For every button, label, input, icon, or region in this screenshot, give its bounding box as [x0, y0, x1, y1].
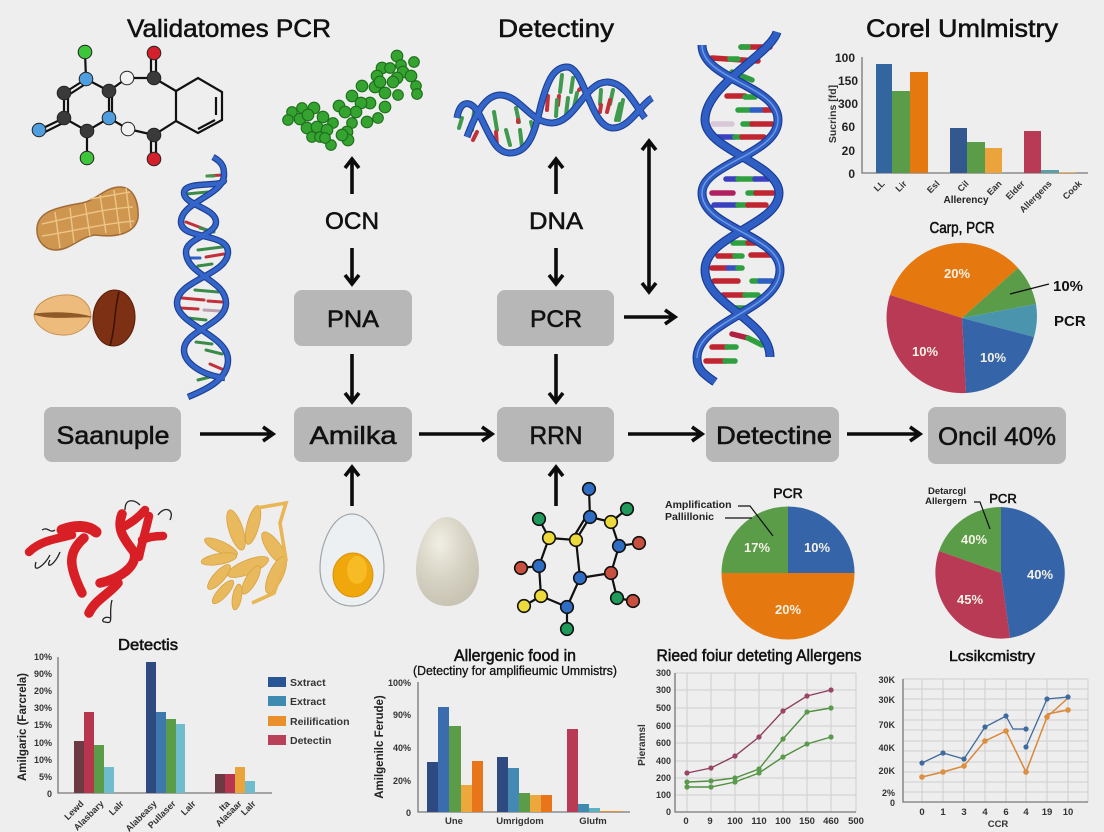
bar chart: Allergenic food: 20%: [393, 776, 411, 786]
line chart: Lcsikcmistry: Lcsikcmistry: [949, 648, 1036, 665]
line chart: Rieed foiur deteting Allergens: 0: [683, 816, 689, 827]
bar chart: Detectis: 15%: [34, 720, 52, 730]
label: DNA: DNA: [529, 208, 583, 235]
icon: green protein blob: [283, 50, 422, 150]
bar chart: top right: [827, 51, 1088, 215]
bar chart: top right: 100: [835, 51, 855, 65]
bar chart: top right: Elder: [1004, 178, 1027, 202]
pie chart: Carp PCR: 20%: [944, 266, 970, 281]
bar chart: Allergenic food: 40%: [393, 743, 411, 753]
bar chart: top right: Ean: [985, 179, 1004, 197]
flow node: PNA: PNA: [327, 306, 379, 333]
arrow: Detectine to Oncil: [847, 427, 920, 441]
flow node: PNA: [294, 290, 412, 346]
pie chart: PCR detected allergen: [925, 486, 1065, 639]
bar chart: Detectis: 10%: [34, 652, 52, 662]
icon: coloured molecule: [515, 483, 645, 635]
flow node: Oncil 40%: [928, 407, 1066, 464]
bar chart: Detectis: 0: [47, 789, 52, 799]
bar chart: top right: LL: [872, 178, 887, 193]
legend: Detectis: [268, 677, 350, 747]
bar chart: Allergenic food: Glufm: [579, 816, 607, 827]
line chart: Lcsikcmistry: 10: [1063, 807, 1073, 818]
pie chart: PCR amplification: 10%: [804, 540, 830, 555]
pie chart: Carp PCR: [887, 220, 1086, 393]
bar chart: top right: Allergens: [1018, 179, 1054, 215]
line chart: Lcsikcmistry: CCR: [988, 819, 1008, 830]
legend: Detectis: Detectin: [290, 735, 331, 747]
bar chart: top right: 300: [838, 97, 858, 111]
line chart: Rieed foiur deteting Allergens: 100: [775, 816, 791, 827]
title: Corel Umlmistry: Corel Umlmistry: [866, 15, 1059, 43]
pie chart: PCR amplification: 17%: [744, 540, 770, 555]
pie chart: Carp PCR: 10%: [1053, 278, 1083, 295]
arrow: RRN to Detectine: [628, 427, 702, 441]
pie chart: PCR amplification: 20%: [775, 602, 801, 617]
bar chart: top right: Esl: [925, 179, 942, 195]
bar chart: top right: Cook: [1061, 178, 1084, 202]
arrow: PNA to Amilka: [345, 354, 359, 402]
line chart: Rieed foiur deteting Allergens: Pieramsl: [637, 724, 648, 766]
icon: DNA helix left: [177, 157, 228, 397]
bar chart: Detectis: Amilgaric (Farcrela): [17, 673, 29, 781]
bar chart: Detectis: 5%: [39, 772, 52, 782]
bar chart: top right: 60: [842, 120, 855, 134]
line chart: Lcsikcmistry: 19: [1042, 807, 1052, 818]
flow node: Detectine: [706, 407, 839, 462]
arrow: double headed vertical: [642, 141, 656, 292]
arrow: DNA to PCR: [549, 248, 563, 284]
pie chart: Carp PCR: 10%: [980, 350, 1006, 365]
line chart: Lcsikcmistry: 0: [890, 798, 895, 808]
line chart: Lcsikcmistry: 1: [940, 807, 946, 818]
icon: wheat grains: [200, 503, 291, 611]
bar chart: top right: Allerency: [943, 195, 989, 206]
icon: red protein ribbon: [29, 501, 171, 623]
bar chart: Detectis: 20%: [34, 686, 52, 696]
line chart: Rieed foiur deteting Allergens: 200: [656, 773, 671, 783]
line chart: Rieed foiur deteting Allergens: 600: [656, 738, 671, 748]
bar chart: Detectis: 10%: [34, 755, 52, 765]
line chart: Rieed foiur deteting Allergens: 150: [799, 816, 815, 827]
line chart: Lcsikcmistry: 40K: [878, 743, 895, 753]
bar chart: Allergenic food: Une: [445, 816, 463, 827]
bar chart: top right: 150: [838, 74, 858, 88]
title: Validatomes PCR: Validatomes PCR: [127, 15, 331, 43]
bar chart: Detectis: 90%: [34, 669, 52, 679]
line chart: Rieed foiur deteting Allergens: 300: [656, 685, 671, 695]
icon: peanut: [37, 187, 138, 250]
line chart: Rieed foiur deteting Allergens: [637, 646, 864, 827]
icon: nut halves: [34, 295, 91, 335]
arrow: molecule to RRN: [549, 467, 563, 506]
pie chart: Carp PCR: PCR: [1054, 313, 1086, 330]
flow node: Oncil 40%: Oncil 40%: [938, 423, 1056, 451]
arrow: OCN to PNA: [345, 248, 359, 284]
title: Detectiny: Detectiny: [498, 15, 615, 43]
bar chart: Detectis: Lalr: [179, 798, 198, 817]
line chart: Lcsikcmistry: 20K: [878, 766, 895, 776]
pie chart: PCR detected allergen: 40%: [1027, 567, 1053, 582]
line chart: Rieed foiur deteting Allergens: 600: [656, 721, 671, 731]
bar chart: Allergenic food: Umrigdom: [496, 816, 544, 827]
bar chart: Detectis: 30%: [34, 703, 52, 713]
icon: cracked egg with yolk: [320, 514, 384, 606]
line chart: Lcsikcmistry: 30K: [878, 675, 895, 685]
arrow: egg to Amilka: [345, 467, 359, 506]
line chart: Lcsikcmistry: 0: [919, 807, 925, 818]
bar chart: Detectis: Alasbary: [72, 799, 106, 832]
flow node: Saanuple: [44, 407, 181, 462]
pie chart: PCR detected allergen: Allergern: [925, 496, 967, 507]
flow node: PCR: [497, 290, 614, 346]
line chart: Rieed foiur deteting Allergens: 0: [666, 807, 671, 817]
line chart: Lcsikcmistry: 30K: [878, 695, 895, 705]
pie chart: PCR amplification: Pallillonic: [665, 511, 714, 523]
bar chart: Detectis: Pullaser: [146, 798, 178, 830]
line chart: Rieed foiur deteting Allergens: 9: [707, 816, 713, 827]
bar chart: Allergenic food: Amilgenilc Ferude): [374, 695, 386, 799]
pie chart: PCR amplification: [665, 485, 854, 640]
flow node: Amilka: [294, 407, 412, 462]
bar chart: Allergenic food: (Detectiny for amplifieumic Ummistrs): [413, 663, 617, 678]
bar chart: top right: 0: [848, 167, 855, 181]
pie chart: PCR detected allergen: PCR: [989, 491, 1017, 506]
line chart: Lcsikcmistry: 4: [982, 807, 988, 818]
line chart: Rieed foiur deteting Allergens: 500: [656, 703, 671, 713]
bar chart: Detectis: 10%: [34, 738, 52, 748]
arrow: PCR to RRN: [549, 354, 563, 402]
flow node: PCR: PCR: [530, 306, 582, 333]
flow node: RRN: RRN: [530, 422, 582, 450]
icon: whole egg: [416, 517, 479, 606]
bar chart: Detectis: Lewd: [62, 799, 86, 822]
arrow: Saanuple to Amilka: [200, 427, 273, 441]
bar chart: top right: 20: [842, 144, 855, 158]
arrow: OCN up: [345, 159, 359, 194]
bar chart: Allergenic food: 90%: [393, 710, 411, 720]
line chart: Lcsikcmistry: 4: [1023, 807, 1029, 818]
flow node: Detectine: Detectine: [716, 422, 832, 450]
line chart: Lcsikcmistry: 70K: [878, 720, 895, 730]
legend: Detectis: Extract: [290, 696, 326, 708]
line chart: Lcsikcmistry: 6: [1003, 807, 1009, 818]
pie chart: Carp PCR: Carp, PCR: [930, 220, 994, 237]
bar chart: top right: Cil: [955, 179, 971, 194]
legend: Detectis: Sxtract: [290, 677, 326, 689]
bar chart: Detectis: Lalr: [239, 798, 258, 817]
bar chart: Allergenic food: [374, 646, 630, 827]
arrow: Amilka to RRN: [419, 427, 492, 441]
bar chart: Detectis: Ita: [217, 798, 232, 813]
line chart: Rieed foiur deteting Allergens: 460: [823, 816, 839, 827]
pie chart: PCR detected allergen: 45%: [957, 592, 983, 607]
line chart: Rieed foiur deteting Allergens: 400: [656, 756, 671, 766]
flow node: Amilka: Amilka: [310, 422, 397, 450]
line chart: Rieed foiur deteting Allergens: Rieed foiur deteting Allergens: [656, 646, 862, 665]
pie chart: PCR amplification: Amplification: [665, 499, 732, 511]
line chart: Rieed foiur deteting Allergens: 100: [656, 790, 671, 800]
pie chart: PCR detected allergen: 40%: [961, 532, 987, 547]
bar chart: Allergenic food: Allergenic food in: [454, 646, 576, 665]
line chart: Rieed foiur deteting Allergens: 300: [656, 668, 671, 678]
line chart: Rieed foiur deteting Allergens: 500: [848, 816, 864, 827]
legend: Detectis: Reilification: [290, 716, 350, 728]
label: OCN: OCN: [325, 208, 379, 235]
flow node: Saanuple: Saanuple: [56, 422, 170, 450]
bar chart: Detectis: Alasaar: [214, 798, 244, 829]
icon: coffee bean: [91, 289, 137, 347]
icon: large DNA helix: [697, 32, 780, 382]
flow node: RRN: [497, 407, 614, 462]
arrow: DNA up: [549, 159, 563, 194]
pie chart: Carp PCR: 10%: [912, 344, 938, 359]
line chart: Rieed foiur deteting Allergens: 110: [751, 816, 767, 827]
bar chart: Detectis: [17, 637, 272, 832]
arrow: PCR to helix: [624, 310, 675, 324]
bar chart: top right: Lir: [893, 178, 909, 194]
pie chart: PCR amplification: PCR: [773, 485, 803, 501]
bar chart: Detectis: Detectis: [118, 637, 178, 654]
line chart: Lcsikcmistry: 2%: [882, 788, 895, 798]
line chart: Lcsikcmistry: [878, 648, 1088, 830]
bar chart: Allergenic food: 100%: [388, 678, 411, 688]
bar chart: Allergenic food: 0: [406, 808, 411, 818]
bar chart: Detectis: Lalr: [107, 798, 126, 817]
icon: horizontal DNA helix: [457, 67, 652, 153]
bar chart: top right: Sucrins [fd]: [827, 85, 839, 143]
line chart: Lcsikcmistry: 3: [961, 807, 967, 818]
line chart: Rieed foiur deteting Allergens: 100: [727, 816, 743, 827]
pie chart: PCR detected allergen: Detarcgl: [928, 486, 966, 497]
icon: chemical structure top left: [32, 45, 222, 166]
